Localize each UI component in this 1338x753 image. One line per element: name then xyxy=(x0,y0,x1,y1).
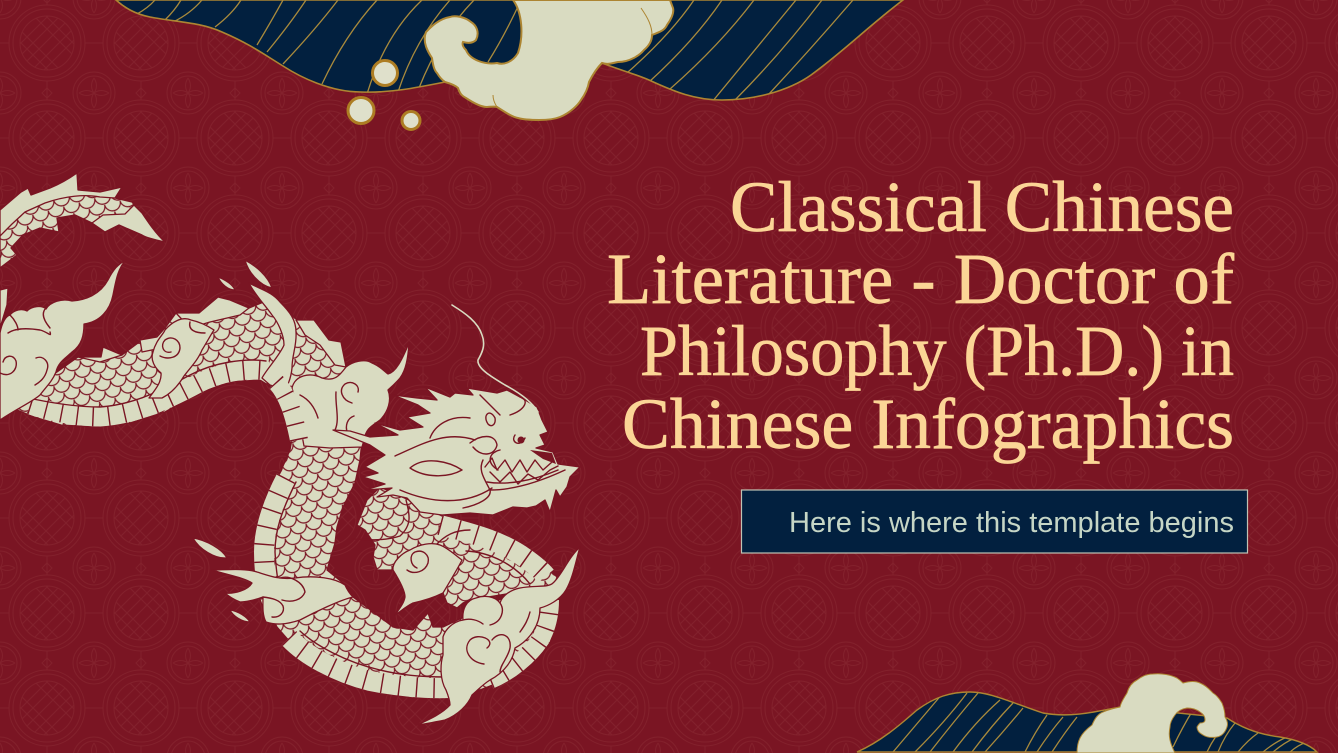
subtitle box xyxy=(742,490,1248,553)
dragon upper body with belly plates xyxy=(17,297,362,443)
subtitle box: Here is where this template begins xyxy=(789,507,1234,539)
dragon tail xyxy=(0,173,165,328)
bottom wave xyxy=(857,692,1317,752)
dragon cloud mid body xyxy=(149,319,214,398)
dragon neck and right body xyxy=(357,487,557,615)
bubble 3 xyxy=(402,112,420,130)
title: Chinese Infographics xyxy=(622,384,1234,464)
dragon head xyxy=(333,305,580,540)
title xyxy=(607,167,1234,464)
dragon cloud lower right xyxy=(417,547,580,725)
top cloud xyxy=(425,0,673,120)
dragon spine fins xyxy=(78,297,346,367)
dragon neck cloud xyxy=(393,544,462,615)
dragon illustration xyxy=(0,173,580,725)
bubble 2 xyxy=(348,98,374,124)
title: Literature - Doctor of xyxy=(607,239,1234,319)
dragon cloud right of body xyxy=(276,343,409,448)
dragon cloud left xyxy=(0,260,126,420)
dragon lower flame xyxy=(193,538,353,624)
title: Classical Chinese xyxy=(730,167,1234,247)
dragon flame and upper petals xyxy=(218,260,296,390)
top wave xyxy=(116,0,903,102)
title: Philosophy (Ph.D.) in xyxy=(640,311,1234,391)
dragon vertical and lower body xyxy=(256,433,558,698)
bottom cloud xyxy=(1077,674,1227,753)
bubble 1 xyxy=(372,60,398,86)
